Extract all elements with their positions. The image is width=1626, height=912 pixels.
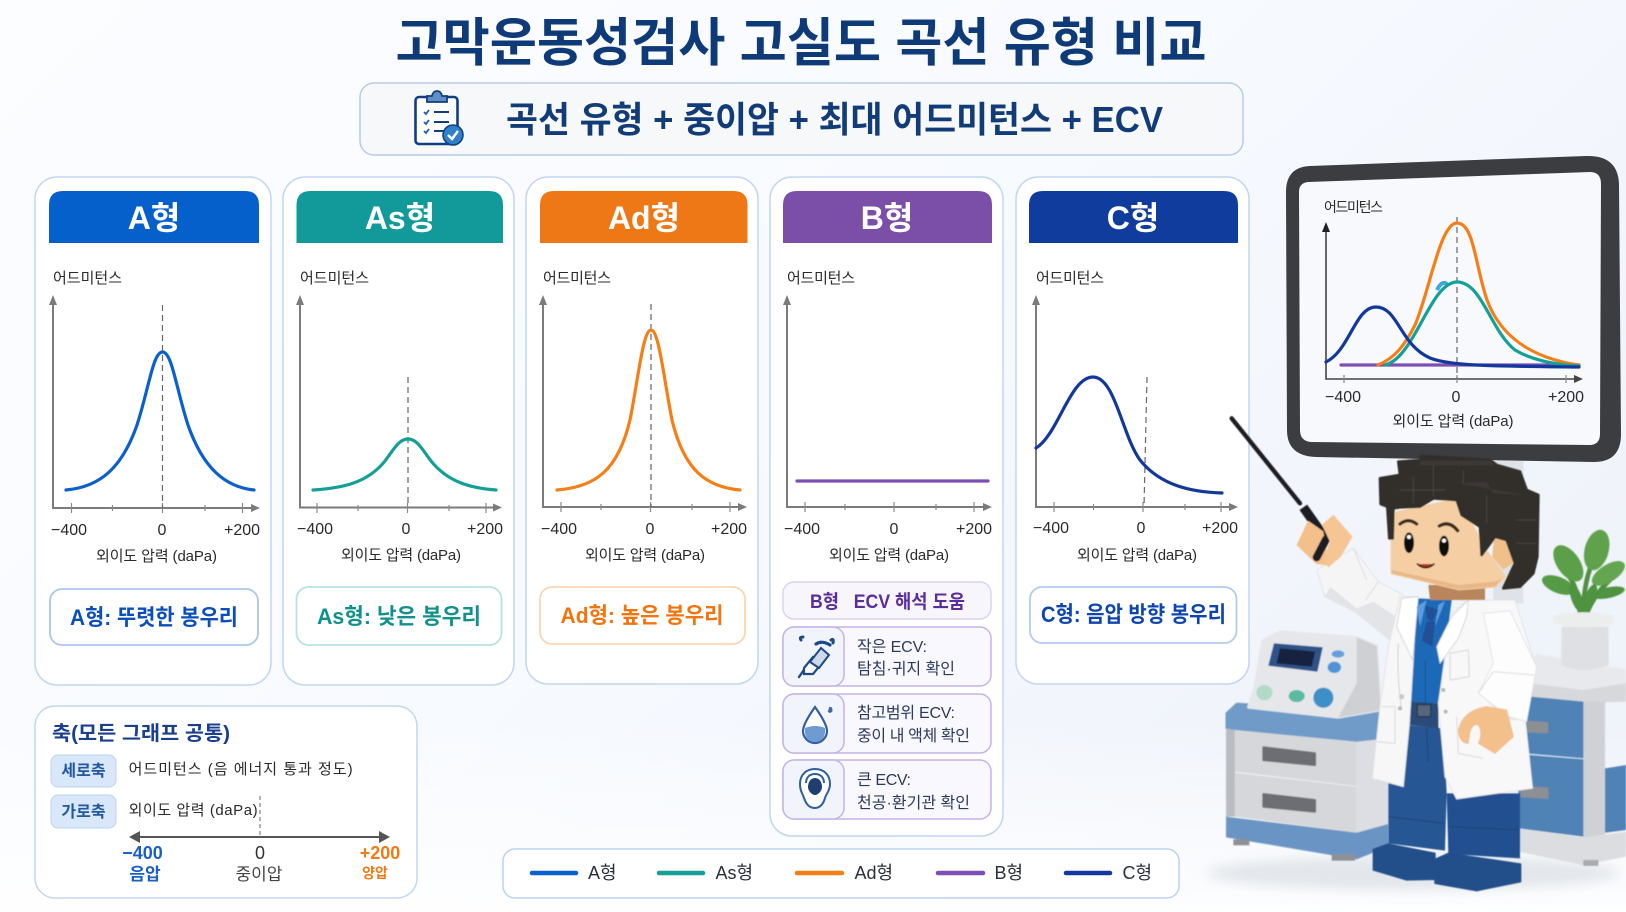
callout: C형 (1030, 587, 1236, 643)
panel: As형 (283, 177, 514, 685)
horizontal axis row: 외이도 압력 (daPa) (129, 802, 258, 819)
floor shadows (1207, 857, 1620, 890)
ECV row: reference: 중이 내 액체 확인 (857, 727, 970, 745)
header: C형 (1029, 191, 1238, 243)
chart: Ad형: −400 (541, 521, 577, 538)
callout: Ad형 (540, 587, 745, 644)
shoes (1373, 844, 1521, 891)
face (1392, 498, 1505, 589)
pressure scale arrow: 0 (255, 843, 265, 863)
legend: B형 (994, 863, 1023, 883)
legend (503, 849, 1179, 898)
right cabinet (1518, 654, 1626, 866)
chart: A형: 외이도 압력 (daPa) (96, 548, 217, 565)
neck (1428, 585, 1485, 600)
combined chart: 외이도 압력 (daPa) (1392, 413, 1514, 430)
panel: A형 (35, 177, 271, 685)
icon: ear (800, 769, 830, 808)
combined chart: −400 (1325, 389, 1361, 406)
title: 고막운동성검사 고실도 곡선 유형 비교 (396, 15, 1206, 73)
callout: C형: C형: 음압 방향 봉우리 (1041, 602, 1226, 627)
monitor (1286, 156, 1621, 462)
chart: As형: −400 (297, 521, 333, 538)
chart: Ad형 (539, 270, 747, 564)
chart: B형: −400 (784, 521, 820, 538)
legend: Ad형 (854, 863, 893, 883)
trousers (1388, 725, 1520, 858)
plant (1539, 527, 1626, 670)
header: As형 (296, 191, 503, 243)
hair (1380, 456, 1538, 588)
axis key heading: 축(모든 그래프 공통) (52, 722, 230, 745)
tympanometer device (1248, 632, 1381, 717)
header: A형 (49, 191, 259, 243)
ECV heading: B형 ECV 해석 도움 (810, 591, 965, 613)
facial features (1400, 521, 1458, 568)
chart: Ad형: 0 (646, 521, 655, 538)
ECV row: small (783, 627, 991, 686)
combined chart (1322, 199, 1584, 430)
header: C형: C형 (1107, 200, 1159, 236)
pressure scale arrow: +200 (360, 843, 400, 863)
ECV row: reference: 참고범위 ECV: (857, 704, 955, 722)
callout: As형: As형: 낮은 봉우리 (317, 604, 481, 629)
chart: A형: 0 (158, 522, 167, 539)
horizontal axis row (51, 795, 258, 828)
chart: C형: +200 (1202, 520, 1238, 537)
combined chart: +200 (1548, 389, 1584, 406)
legend: A형 (588, 863, 617, 883)
panel: axis key (35, 706, 417, 898)
left cabinet (1226, 703, 1388, 861)
panel: B형 (770, 177, 1003, 836)
header: B형: B형 (861, 200, 913, 236)
raised hand front (1323, 516, 1352, 567)
callout: As형 (296, 587, 502, 645)
callout: A형: A형: 뚜렷한 봉우리 (70, 605, 238, 630)
chart: A형: −400 (51, 522, 87, 539)
chart: C형: 0 (1137, 520, 1146, 537)
ear (1493, 538, 1517, 568)
pressure scale arrow: 음압 (129, 865, 161, 884)
pointer grip (1317, 539, 1326, 557)
chart: As형: 어드미턴스 (300, 270, 369, 287)
chart: B형: 0 (890, 521, 899, 538)
lanyard (1424, 660, 1426, 704)
tie and collar (1417, 600, 1445, 647)
header: Ad형 (540, 191, 748, 243)
pressure scale arrow (122, 796, 400, 884)
pressure scale arrow: −400 (122, 843, 163, 863)
chart: B형: 어드미턴스 (787, 270, 855, 287)
subtitle text: 곡선 유형 + 중이압 + 최대 어드미턴스 + ECV (506, 99, 1163, 140)
callout: A형 (50, 589, 258, 645)
ECV row: small: 탐침·귀지 확인 (857, 660, 955, 678)
ECV row: large: 큰 ECV: (857, 772, 911, 789)
illustration: background furniture (1207, 457, 1626, 890)
chart: C형 (1032, 270, 1238, 564)
horizontal axis row: 가로축 (61, 803, 106, 821)
lower hand (1458, 707, 1513, 753)
chart: As형: +200 (467, 521, 503, 538)
raised sleeve (1317, 548, 1403, 640)
icon: syringe (799, 637, 833, 677)
monitor screen (1299, 172, 1601, 445)
vertical axis row (51, 755, 353, 787)
ECV row: large (783, 760, 991, 819)
chart: C형: 어드미턴스 (1036, 270, 1104, 287)
icon: clipboard checklist (416, 91, 463, 145)
character: doctor with pointer (1232, 418, 1538, 891)
combined chart: 어드미턴스 (1324, 199, 1383, 215)
chart: Ad형: 어드미턴스 (543, 270, 611, 287)
panel: C형 (1016, 177, 1249, 684)
monitor bezel (1286, 156, 1621, 462)
ECV row: small: 작은 ECV: (857, 638, 927, 656)
belt (1409, 702, 1438, 728)
panel: Ad형 (526, 177, 758, 684)
chart: A형 (49, 270, 260, 565)
chart: As형 (296, 270, 503, 564)
chart: A형: +200 (224, 522, 260, 539)
callout: Ad형: Ad형: 높은 봉우리 (560, 603, 724, 628)
icon: water drop (803, 707, 832, 743)
chart: Ad형: +200 (711, 521, 747, 538)
chart: B형: +200 (956, 521, 992, 538)
legend: C형 (1122, 863, 1152, 883)
subtitle banner (360, 83, 1243, 155)
chart: Ad형: 외이도 압력 (daPa) (585, 547, 705, 564)
header: Ad형: Ad형 (608, 200, 680, 236)
chart: C형: −400 (1033, 520, 1069, 537)
raised hand back (1297, 522, 1328, 565)
chart: As형: 0 (402, 521, 411, 538)
chart: A형: 어드미턴스 (53, 270, 122, 287)
chart: As형: 외이도 압력 (daPa) (341, 547, 461, 564)
shirt (1411, 598, 1452, 703)
legend: As형 (716, 863, 753, 883)
vertical axis row: 어드미턴스 (음 에너지 통과 정도) (129, 761, 353, 778)
chart: C형: 외이도 압력 (daPa) (1077, 547, 1197, 564)
header: As형: As형 (365, 200, 435, 236)
pointer stick (1232, 418, 1326, 539)
combined chart: 0 (1452, 389, 1461, 406)
ECV heading (783, 582, 991, 619)
ECV row: large: 천공·환기관 확인 (857, 794, 970, 812)
coat sleeve (1478, 611, 1537, 722)
pressure scale arrow: 양압 (362, 865, 388, 881)
ECV row: reference (783, 694, 991, 753)
chart: B형: 외이도 압력 (daPa) (829, 547, 949, 564)
monitor stand (1493, 457, 1523, 603)
header: A형: A형 (128, 200, 180, 236)
lab coat (1372, 597, 1536, 799)
header: B형 (783, 191, 992, 243)
vertical axis row: 세로축 (61, 762, 106, 780)
pressure scale arrow: 중이압 (236, 865, 283, 884)
chart: B형 (783, 270, 992, 564)
